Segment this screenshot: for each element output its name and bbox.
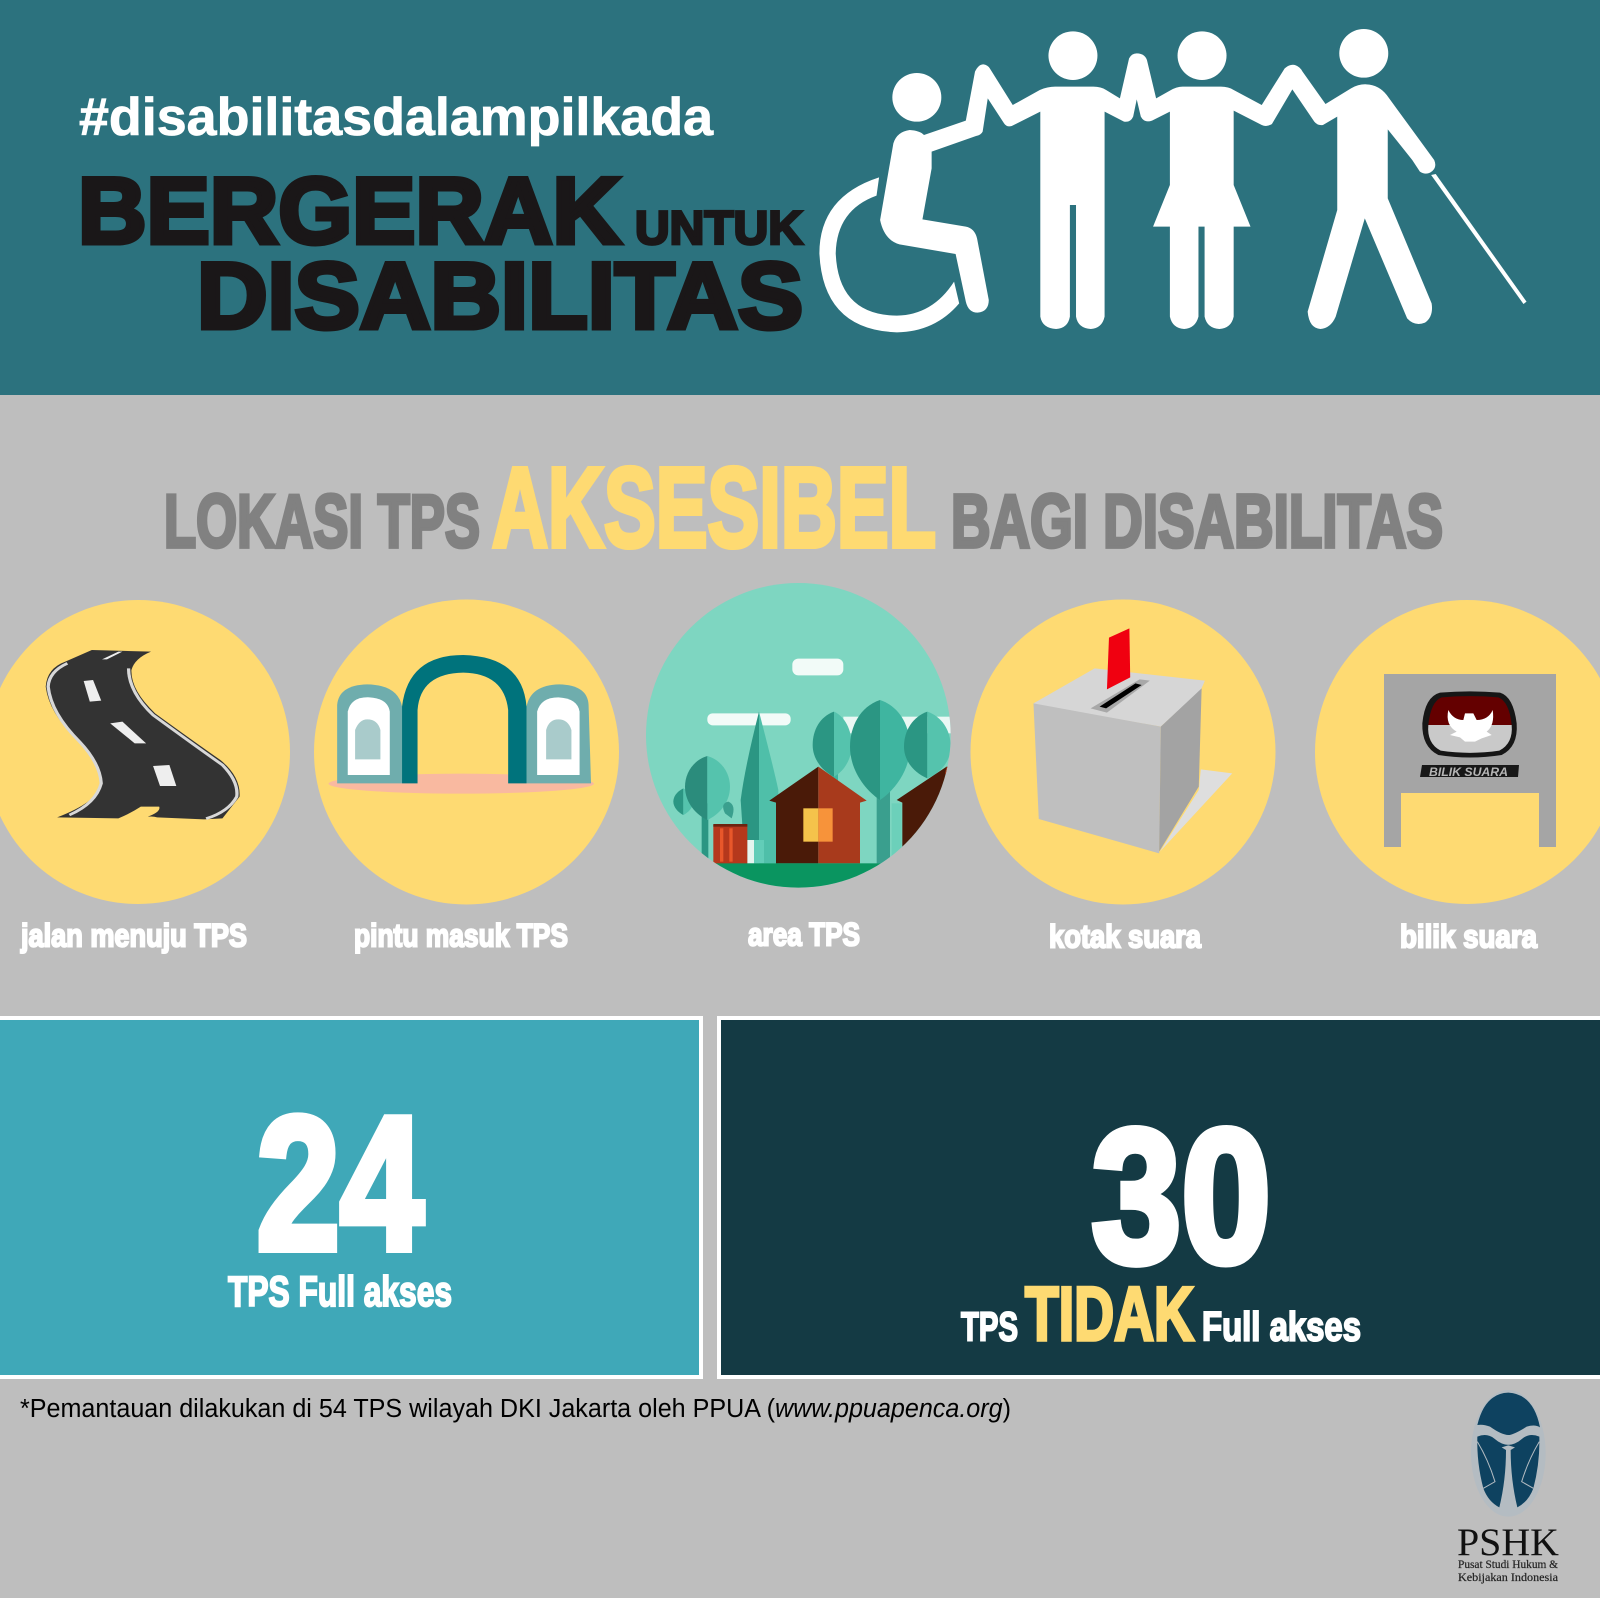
heading part: lokasi tps: LOKASI TPS — [164, 479, 480, 563]
item: kotak suara — [970, 600, 1276, 954]
icon: gate — [329, 655, 594, 794]
logo: PSHK — [1457, 1390, 1559, 1584]
item: jalan menuju TPS — [0, 600, 290, 954]
panel: 24 TPS full akses — [0, 1018, 701, 1377]
number: 24: 24 — [256, 1078, 424, 1290]
label: area TPS — [748, 916, 860, 952]
icon: logo emblem — [1471, 1390, 1546, 1517]
panel: 30 TPS tidak full akses — [719, 1018, 1600, 1377]
icon: road — [46, 650, 240, 819]
caption: TPS Full akses — [228, 1268, 452, 1316]
logo wordmark: PSHK — [1457, 1521, 1559, 1564]
label: jalan menuju TPS — [20, 918, 247, 954]
booth sign text: BILIK SUARA — [1429, 767, 1508, 779]
icon: neighbourhood scene — [643, 580, 955, 890]
item: bilik suara — [1315, 600, 1600, 954]
heading: lokasi tps aksesibel — [164, 444, 1443, 570]
logo subtitle line 2: Kebijakan Indonesia — [1458, 1570, 1559, 1584]
label: kotak suara — [1049, 918, 1201, 954]
logo subtitle line 1: Pusat Studi Hukum & — [1458, 1557, 1559, 1571]
panel: header banner — [0, 0, 1600, 395]
label: pintu masuk TPS — [354, 918, 568, 954]
item: area TPS — [643, 580, 955, 952]
icon: people with disabilities holding hands — [819, 29, 1527, 332]
number: 30: 30 — [1092, 1091, 1271, 1303]
item: pintu masuk TPS — [314, 600, 619, 954]
title: disabilitas: DISABILITAS — [197, 243, 803, 348]
circle: yellow — [314, 600, 619, 904]
caption part: TPS: TPS — [961, 1304, 1018, 1350]
footnote: *Pemantauan dilakukan di 54 TPS wilayah DKI Jakarta oleh PPUA (www.ppuapenca.org) — [20, 1395, 1011, 1423]
hashtag heading: #disabilitasdalampilkada — [79, 88, 714, 147]
circle: yellow — [0, 600, 290, 904]
title: bergerak: BERGERAK — [78, 158, 621, 263]
title: untuk: UNTUK — [635, 201, 803, 254]
label: bilik suara — [1400, 918, 1537, 954]
circle: yellow — [970, 600, 1276, 904]
icon: ballot box — [1033, 628, 1232, 853]
caption part: tidak: TIDAK — [1025, 1272, 1194, 1357]
circle: yellow — [1315, 600, 1600, 904]
caption part: full akses: Full akses — [1202, 1304, 1361, 1350]
heading part: aksesibel: AKSESIBEL — [492, 444, 936, 570]
icon: voting booth — [1384, 674, 1556, 847]
icon: booth emblem — [1422, 691, 1517, 757]
